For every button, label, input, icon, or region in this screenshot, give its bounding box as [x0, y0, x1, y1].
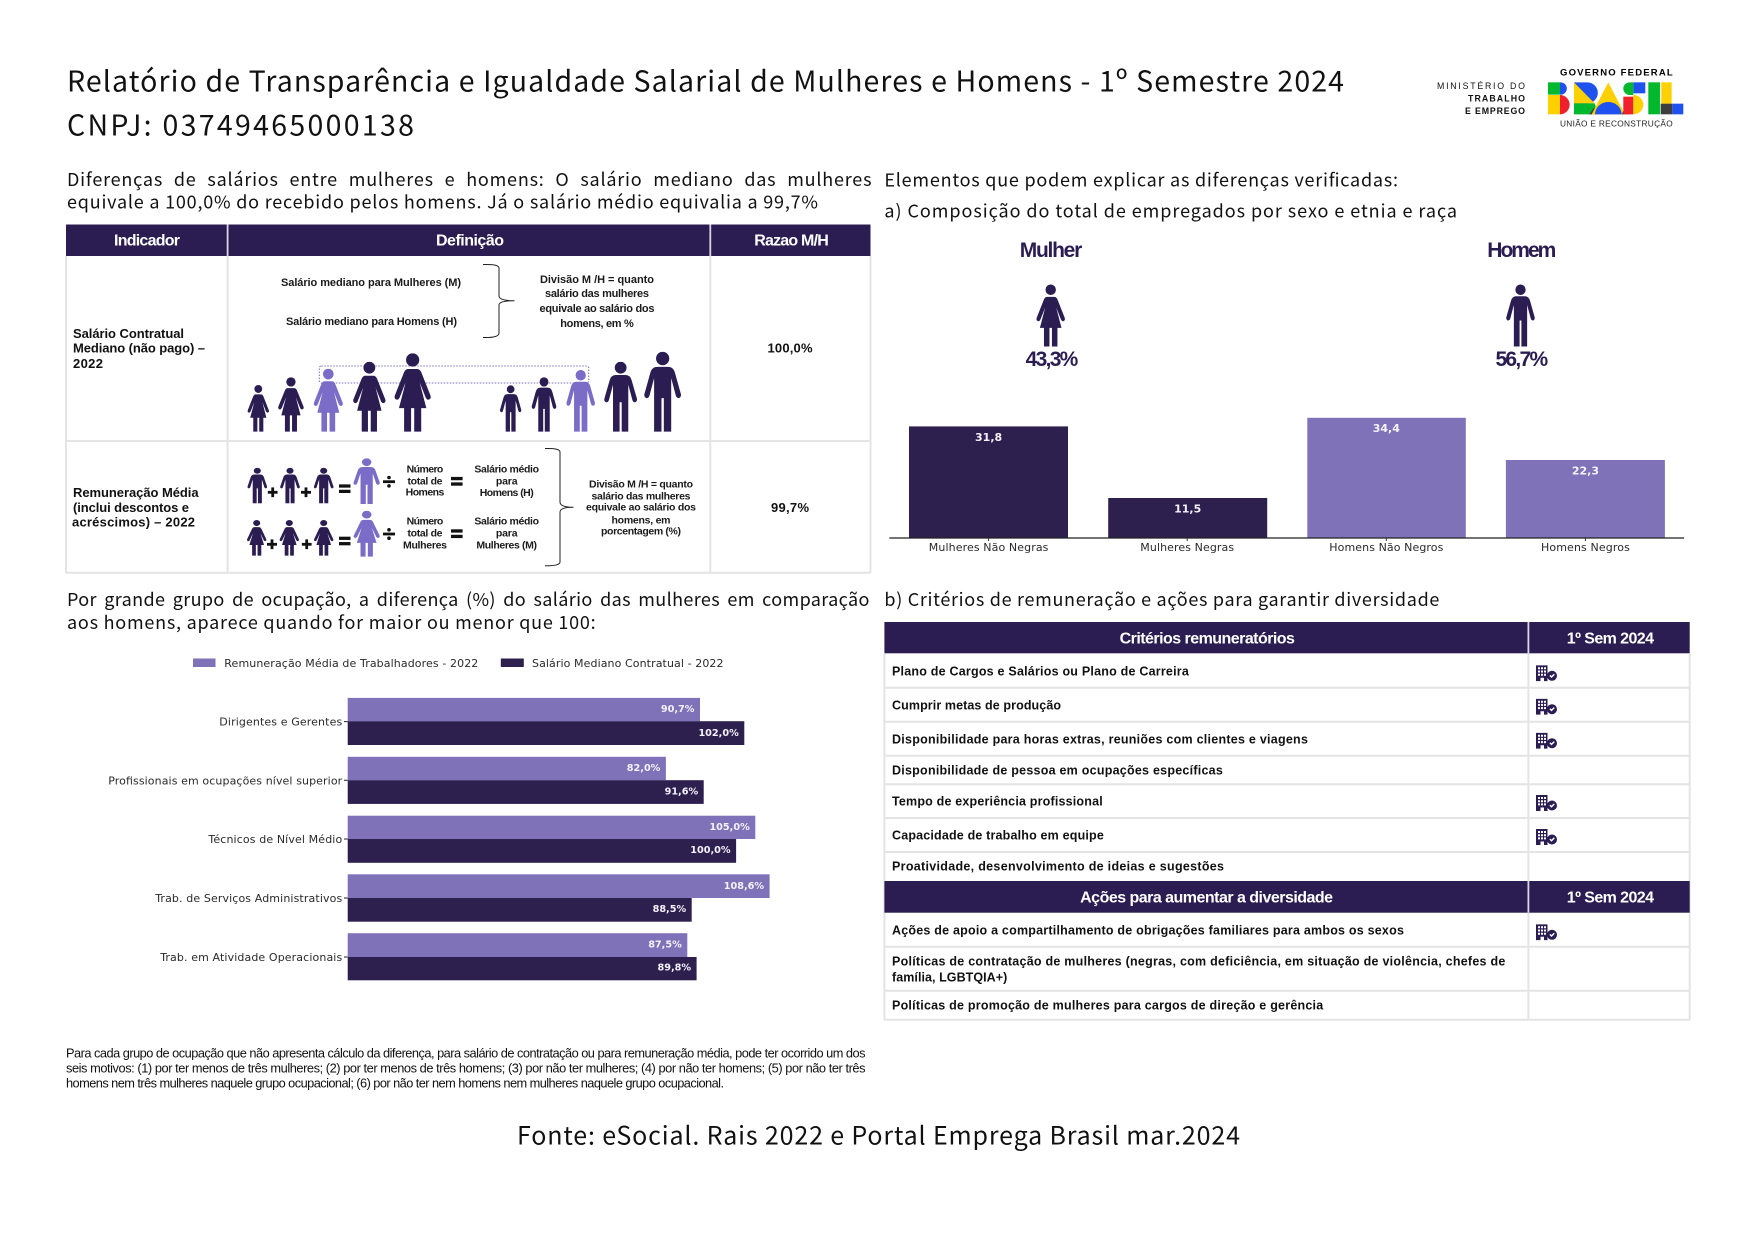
- intro text: diferenças de salários: equivale a 100,0% do recebido pelos homens. Já o salário médio equivalia a 99,7%: [67, 189, 818, 215]
- união e reconstrução caption: UNIÃO E RECONSTRUÇÃO: [1560, 119, 1673, 129]
- criteria rows: Plano de Cargos e Salários ou Plano de Carreira: [892, 665, 1190, 679]
- bar values: 22,3: [1572, 465, 1599, 478]
- bar values: 87,5%: [648, 939, 682, 950]
- label: mulher: Mulher: [1020, 239, 1082, 262]
- header: ações para aumentar a diversidade: 1º Sem 2024: [1567, 889, 1654, 906]
- bar values: [627, 704, 764, 974]
- governo federal caption: GOVERNO FEDERAL: [1560, 67, 1673, 78]
- division explanation: salário das mulheres: [545, 288, 649, 300]
- equation labels: men: Salário médio: [474, 463, 539, 475]
- indicator: salário contratual mediano: Salário Contratual: [73, 326, 184, 341]
- header: ações para aumentar a diversidade: Ações para aumentar a diversidade: [1080, 889, 1333, 906]
- criteria rows: Capacidade de trabalho em equipe: [892, 829, 1104, 843]
- category labels: [108, 715, 343, 964]
- razão: 99,7%: 99,7%: [771, 500, 809, 515]
- salary labels: Salário mediano para Homens (H): [286, 316, 457, 328]
- equation labels: men: Número: [407, 463, 443, 475]
- division explanation: Divisão M /H = quanto: [540, 274, 654, 286]
- criteria rows: Tempo de experiência profissional: [892, 795, 1103, 809]
- table header: Razao M/H: [754, 233, 829, 250]
- action rows: [892, 924, 1505, 1013]
- action rows: família, LGBTQIA+): [892, 970, 1007, 984]
- indicator: remuneração média: [72, 485, 199, 530]
- criteria rows: [892, 665, 1308, 874]
- heading: elementos explicativos: [884, 166, 1457, 223]
- bars: [348, 698, 770, 980]
- panel: mulher: [1020, 239, 1082, 371]
- bar values: 88,5%: [653, 904, 686, 915]
- criteria rows: Disponibilidade para horas extras, reuniões com clientes e viagens: [892, 733, 1308, 747]
- category labels: Trab. em Atividade Operacionais: [159, 951, 342, 964]
- heading: por grande grupo de ocupação: aos homens, aparece quando for maior ou menor que 100:: [67, 609, 596, 635]
- footnote: [66, 1046, 866, 1090]
- bar values: 108,6%: [724, 881, 764, 892]
- panel: tabela de indicadores: [66, 224, 870, 573]
- equation labels: men: Homens (H): [480, 487, 534, 499]
- table header: [66, 224, 870, 256]
- category labels: [929, 541, 1630, 554]
- share: 43,3%: 43,3%: [1026, 348, 1079, 371]
- equation labels: women: [403, 516, 539, 552]
- equation labels: men: para: [496, 476, 518, 488]
- division explanation: porcentagem (%): [601, 526, 681, 538]
- equation: men: [247, 458, 463, 504]
- panel: critérios e ações: [884, 622, 1690, 1020]
- logo: ministério e governo federal: [1437, 67, 1683, 129]
- action rows: Políticas de contratação de mulheres (negras, com deficiência, em situação de violência, chefes de: [892, 955, 1505, 969]
- equation labels: men: Homens: [406, 486, 445, 498]
- header: critérios remuneratórios: Critérios remuneratórios: [1120, 630, 1295, 647]
- source line: Fonte: eSocial. Rais 2022 e Portal Emprega Brasil mar.2024: [517, 1117, 1240, 1153]
- indicator: salário contratual mediano: [73, 326, 205, 371]
- indicator: salário contratual mediano: 2022: [73, 356, 103, 371]
- category labels: Homens Não Negros: [1329, 541, 1444, 554]
- heading: elementos explicativos: a) Composição do total de empregados por sexo e etnia e raça: [884, 197, 1457, 223]
- header: ações para aumentar a diversidade: [884, 881, 1690, 913]
- definition: remuneração média: [247, 448, 696, 566]
- table header: Definição: [436, 233, 504, 250]
- intro text: diferenças de salários: [67, 166, 872, 215]
- definition: salário mediano: [248, 264, 681, 432]
- division explanation: [586, 478, 696, 538]
- icons: company confirmed: [1536, 665, 1557, 845]
- category labels: Mulheres Negras: [1140, 541, 1234, 554]
- equation labels: women: Número: [407, 516, 443, 528]
- division explanation: homens, em %: [560, 318, 634, 330]
- bar chart: ocupação: [108, 657, 770, 980]
- bar values: 34,4: [1373, 422, 1400, 435]
- panel: homem: [1487, 239, 1556, 371]
- bar values: 90,7%: [661, 704, 695, 715]
- brasil wordmark: [1548, 82, 1683, 114]
- category labels: Mulheres Não Negras: [929, 541, 1049, 554]
- icon: woman: [1036, 284, 1065, 346]
- bar values: 11,5: [1174, 502, 1201, 515]
- division explanation: equivale ao salário dos: [540, 303, 654, 315]
- legend: Remuneração Média de Trabalhadores - 2022: [224, 657, 478, 670]
- footnote: Para cada grupo de ocupação que não apresenta cálculo da diferença, para salário de contratação ou para remuneração média, pode ter ocorrido um dos: [66, 1046, 865, 1061]
- bar values: 89,8%: [657, 963, 691, 974]
- action rows: Ações de apoio a compartilhamento de obrigações familiares para ambos os sexos: [892, 924, 1404, 938]
- bar values: 102,0%: [698, 728, 739, 739]
- equation labels: women: para: [496, 528, 518, 540]
- division explanation: equivale ao salário dos: [586, 502, 696, 514]
- equation labels: women: Salário médio: [474, 516, 539, 528]
- title: Relatório de Transparência e Igualdade Salarial de Mulheres e Homens - 1º Semestre 2024: [67, 60, 1344, 101]
- division explanation: homens, em: [612, 514, 670, 526]
- header: critérios remuneratórios: 1º Sem 2024: [1567, 630, 1654, 647]
- equation labels: women: Mulheres: [403, 540, 447, 552]
- icon: man: [1506, 284, 1535, 346]
- bracket: [545, 448, 574, 566]
- equation labels: men: total de: [408, 476, 443, 488]
- heading: critérios de remuneração: b) Critérios de remuneração e ações para garantir diversidade: [884, 586, 1439, 612]
- legend: Salário Mediano Contratual - 2022: [532, 657, 724, 670]
- division explanation: [540, 274, 654, 330]
- equation labels: women: total de: [408, 528, 443, 540]
- bar chart: composição por sexo e raça: [889, 418, 1684, 554]
- ministry name: [1437, 81, 1525, 116]
- bar values: [975, 422, 1599, 515]
- heading: por grande grupo de ocupação: [67, 586, 869, 635]
- legend: [193, 657, 724, 670]
- heading: por grande grupo de ocupação: Por grande grupo de ocupação, a diferença (%) do salário das mulheres em comparação: [67, 586, 869, 612]
- equation labels: women: Mulheres (M): [476, 540, 537, 552]
- indicator: remuneração média: (inclui descontos e: [73, 500, 189, 515]
- icon: company confirmed: [1536, 924, 1557, 940]
- criteria rows: Cumprir metas de produção: [892, 699, 1061, 713]
- median highlight box: [319, 366, 589, 383]
- equation: women: [247, 511, 463, 557]
- bracket: [483, 264, 514, 338]
- indicator: remuneração média: Remuneração Média: [73, 485, 199, 500]
- ministry name: TRABALHO: [1468, 94, 1525, 104]
- division explanation: Divisão M /H = quanto: [589, 478, 693, 490]
- ministry name: MINISTÉRIO DO: [1437, 81, 1525, 91]
- category labels: Trab. de Serviços Administrativos: [154, 892, 342, 905]
- heading: elementos explicativos: Elementos que podem explicar as diferenças verificadas:: [884, 166, 1398, 192]
- equation labels: men: [406, 463, 539, 499]
- title: [67, 60, 1344, 145]
- salary labels: [281, 277, 461, 328]
- category labels: Técnicos de Nível Médio: [207, 833, 342, 846]
- footnote: homens nem três mulheres naquele grupo ocupacional; (6) por não ter nem homens nem mulheres naquele grupo ocupacional.: [66, 1076, 724, 1090]
- footnote: seis motivos: (1) por ter menos de três mulheres; (2) por ter menos de três homens; (3) por não ter mulheres; (4) por não ter homens; (5) por não ter três: [66, 1060, 866, 1076]
- category labels: Homens Negros: [1541, 541, 1630, 554]
- bar values: 100,0%: [690, 845, 731, 856]
- bar values: 91,6%: [665, 787, 698, 798]
- title: CNPJ: 03749465000138: [67, 104, 414, 145]
- salary labels: Salário mediano para Mulheres (M): [281, 277, 461, 289]
- header: critérios remuneratórios: [884, 622, 1690, 653]
- category labels: Dirigentes e Gerentes: [219, 715, 342, 728]
- table header: Indicador: [114, 233, 180, 250]
- ministry name: E EMPREGO: [1465, 106, 1525, 116]
- division explanation: salário das mulheres: [592, 490, 691, 502]
- intro text: diferenças de salários: Diferenças de salários entre mulheres e homens: O salário mediano das mulheres: [67, 166, 872, 192]
- share: 56,7%: 56,7%: [1495, 348, 1548, 371]
- bar values: 82,0%: [627, 763, 661, 774]
- indicator: remuneração média: acréscimos) – 2022: [72, 515, 195, 530]
- icons: women by salary: [248, 353, 431, 432]
- icons: men by salary: [500, 352, 681, 432]
- bar values: 31,8: [975, 431, 1002, 444]
- razão: 100,0%: 100,0%: [768, 341, 813, 356]
- bar values: 105,0%: [709, 822, 750, 833]
- category labels: Profissionais em ocupações nível superior: [108, 774, 343, 787]
- action rows: Políticas de promoção de mulheres para cargos de direção e gerência: [892, 999, 1324, 1013]
- criteria rows: Disponibilidade de pessoa em ocupações específicas: [892, 764, 1223, 778]
- label: homem: Homem: [1487, 239, 1556, 262]
- criteria rows: Proatividade, desenvolvimento de ideias e sugestões: [892, 860, 1224, 874]
- indicator: salário contratual mediano: Mediano (não pago) –: [73, 341, 205, 356]
